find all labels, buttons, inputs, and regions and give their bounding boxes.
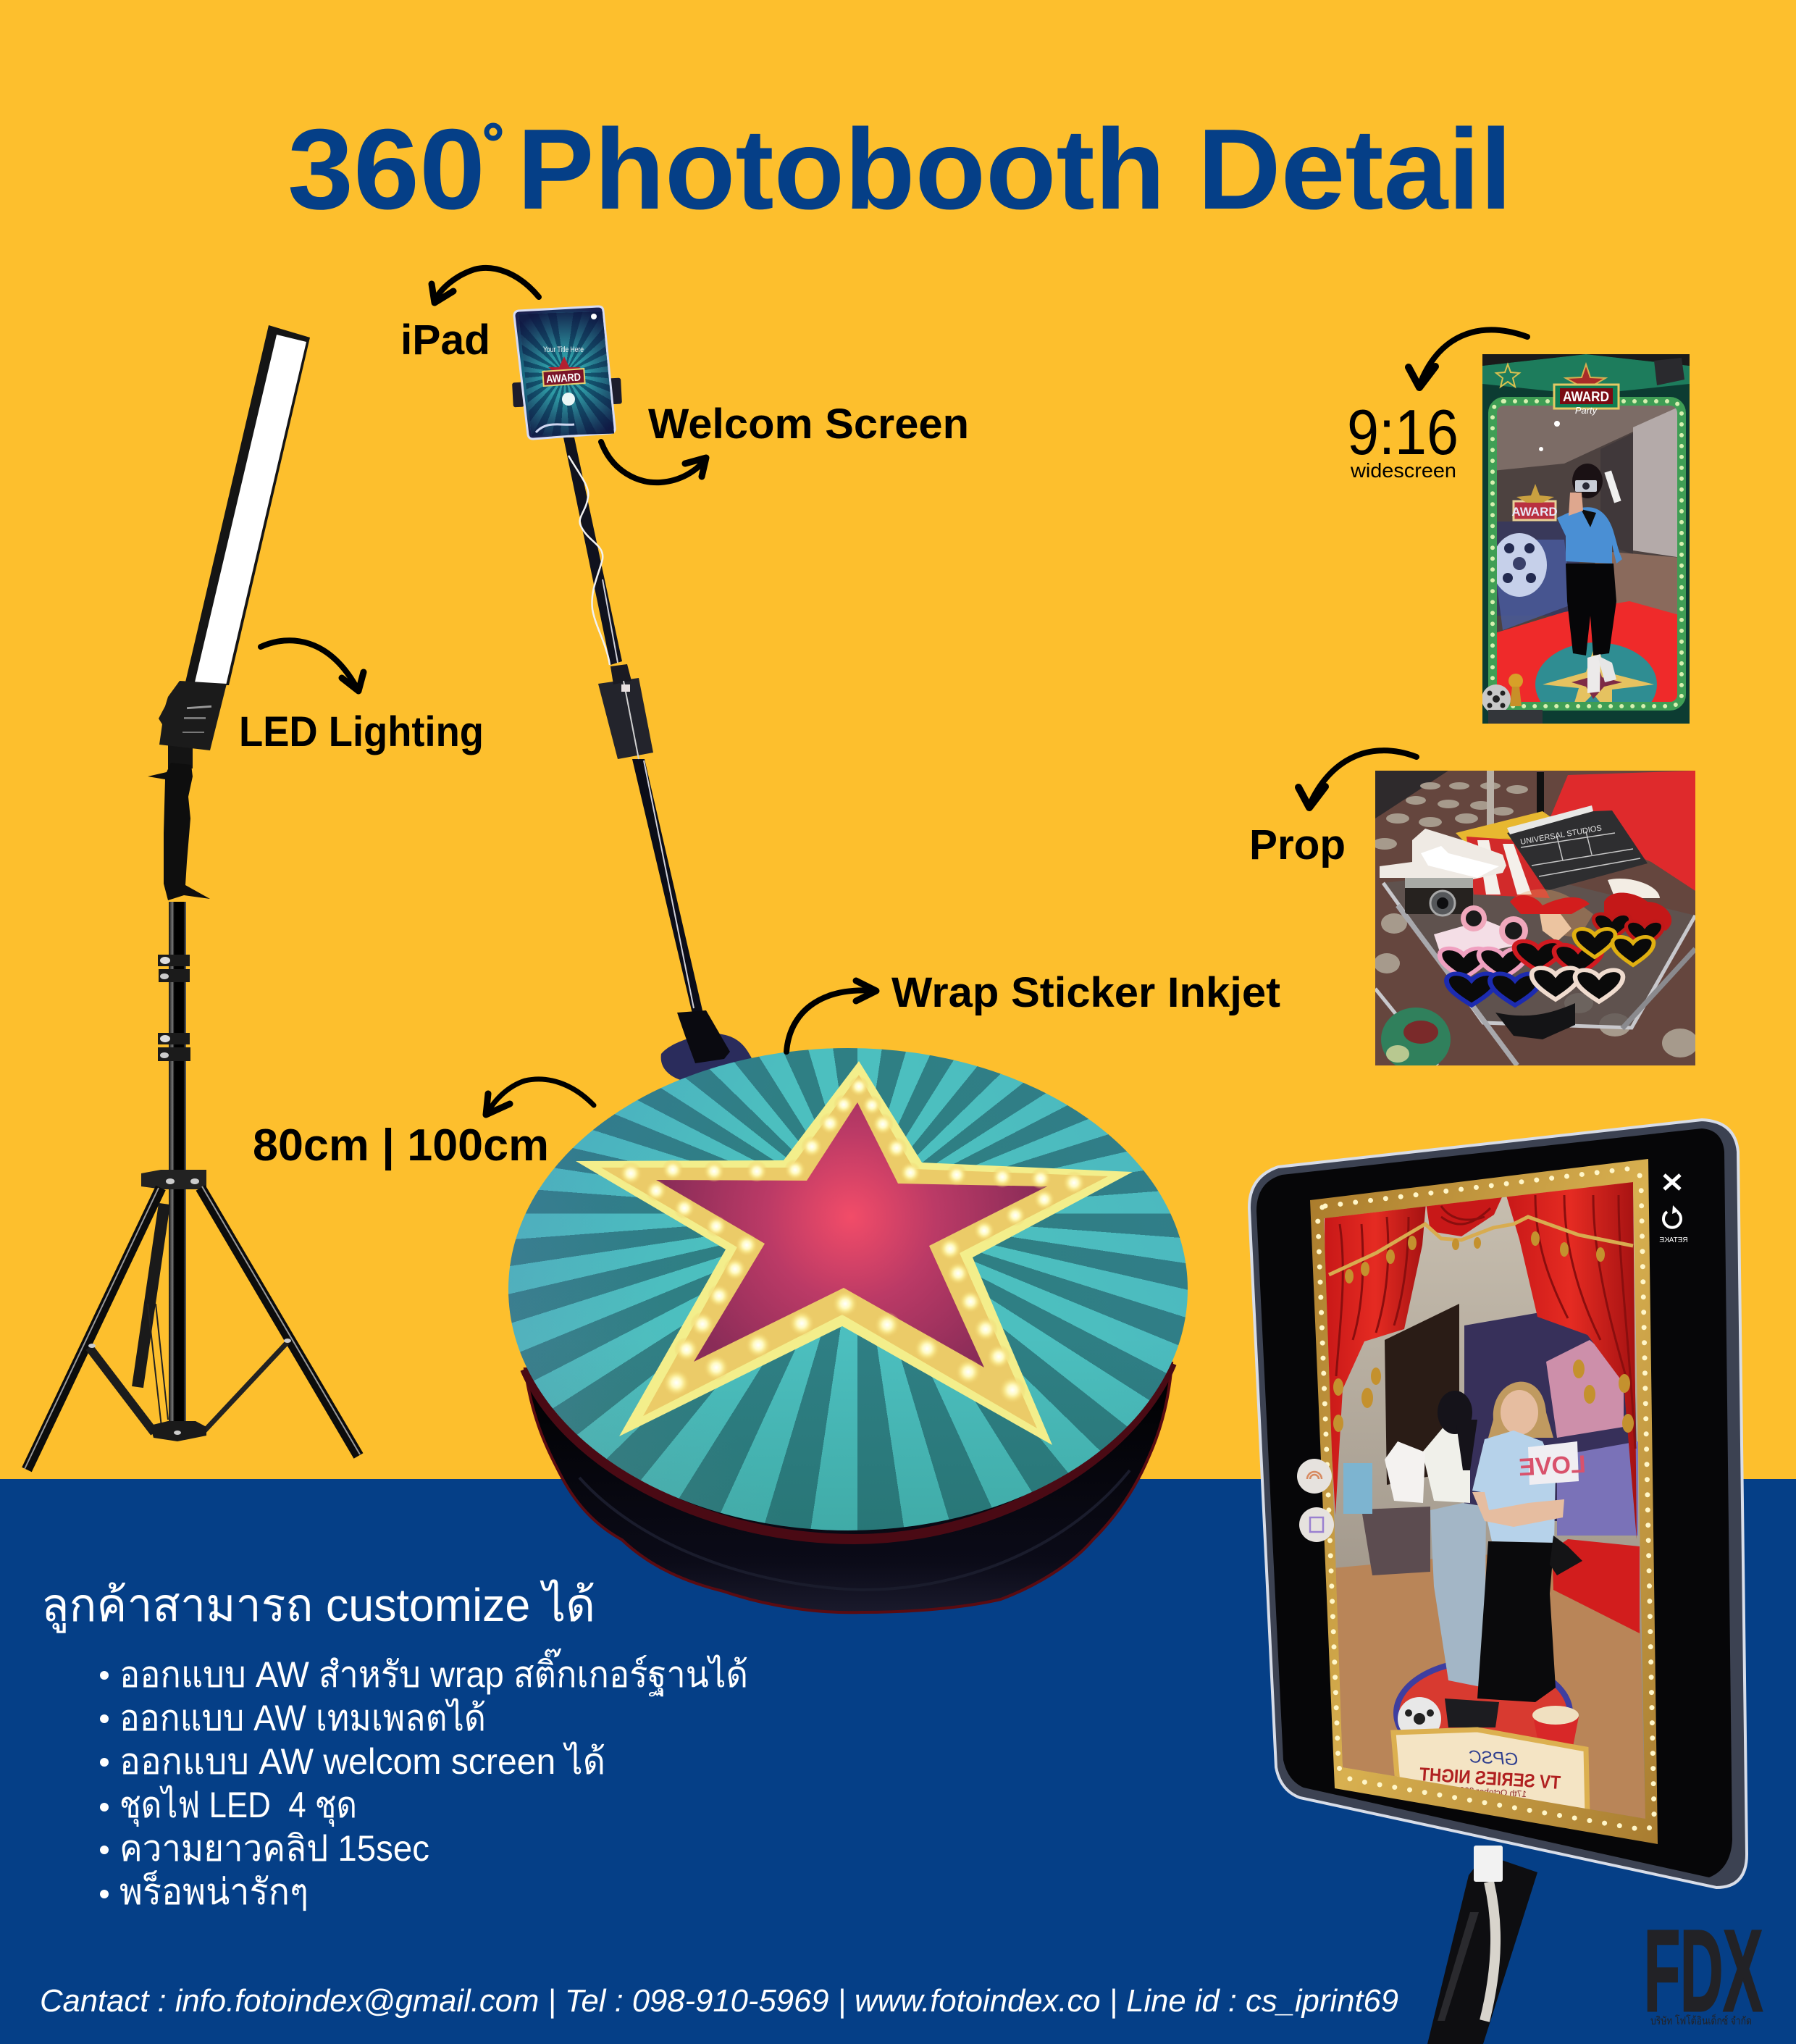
label: LED Lighting: LED Lighting <box>239 708 484 755</box>
customization list: ออกแบบ AW welcom screen ได้ <box>119 1741 605 1782</box>
arrow: to LED Lighting label <box>261 640 364 691</box>
photo: 9:16 sample frame: AWARD <box>1511 505 1558 519</box>
label: 9:16 widescreen: 9:16 <box>1347 396 1459 468</box>
tablet showing 360 capture: LOVE <box>1518 1451 1587 1481</box>
label: Prop: Prop <box>1249 821 1346 868</box>
rotating platform base <box>525 1363 1172 1612</box>
arrow: to iPad label <box>432 268 539 303</box>
customization heading: ลูกค้าสามารถ customize ได้ <box>41 1579 595 1633</box>
arrow: to Prop label <box>1298 750 1417 808</box>
star outline <box>576 1061 1133 1445</box>
label: platform size: 80cm | 100cm <box>253 1121 549 1171</box>
tablet stand with cable <box>1427 1854 1537 2044</box>
customization list: ความยาวคลิป 15sec <box>119 1828 429 1869</box>
customization list: ชุดไฟ LED 4 ชุด <box>119 1785 357 1827</box>
tablet showing 360 capture <box>1249 1120 1747 1888</box>
label: Wrap Sticker Inkjet: Wrap Sticker Inkjet <box>891 969 1280 1016</box>
title: 360 <box>288 106 485 233</box>
logo: FDX: บริษัท โฟโต้อินเด็กซ์ จำกัด <box>1650 2014 1752 2027</box>
tablet showing 360 capture: RETAKE <box>1659 1236 1688 1244</box>
label: Welcom Screen: Welcom Screen <box>648 401 969 448</box>
photo: props on table <box>1372 771 1698 1071</box>
star gold band <box>601 1075 1108 1428</box>
star red centre <box>656 1102 1047 1367</box>
iPad on stand: AWARD <box>546 371 582 386</box>
photo: 9:16 sample frame: Party <box>1575 405 1598 416</box>
iPad on stand: Your Title Here <box>543 345 584 354</box>
customization list: ออกแบบ AW เทมเพลตได้ <box>119 1698 486 1738</box>
arrow: to platform size label <box>486 1079 594 1115</box>
arrow: to Wrap Sticker label <box>786 981 876 1052</box>
photo: 9:16 sample frame: AWARD <box>1563 390 1609 405</box>
photo: props on table: UNIVERSAL STUDIOS <box>1519 824 1603 847</box>
arrow: to Welcom Screen label <box>601 442 706 482</box>
tablet showing 360 capture: TV SERIES NIGHT <box>1419 1763 1561 1793</box>
marquee bulbs <box>619 1076 1086 1404</box>
label: 9:16 widescreen: widescreen <box>1350 459 1456 482</box>
customization list <box>100 1648 748 1912</box>
title: Photobooth Detail <box>517 106 1512 233</box>
label: iPad: iPad <box>400 317 490 364</box>
LED light on tripod <box>25 325 360 1470</box>
iPad on stand <box>512 306 753 1083</box>
contact line: Cantact : info.fotoindex@gmail.com | Tel : 098-910-5969 | www.fotoindex.co | Line id : cs_iprint69 <box>40 1983 1398 2019</box>
tablet showing 360 capture: GPSC <box>1468 1747 1519 1769</box>
blue lower band <box>0 1479 1796 2044</box>
arrow: to 9:16 label <box>1409 330 1527 388</box>
platform top: sunburst wrap sticker <box>508 1048 1188 1530</box>
photo: 9:16 sample frame <box>1482 354 1690 726</box>
customization list: พร็อพน่ารักๆ <box>119 1870 309 1912</box>
tablet showing 360 capture: 17th October 2024 <box>1454 1785 1527 1799</box>
customization list: ออกแบบ AW สำหรับ wrap สติ๊กเกอร์ฐานได้ <box>119 1648 748 1696</box>
